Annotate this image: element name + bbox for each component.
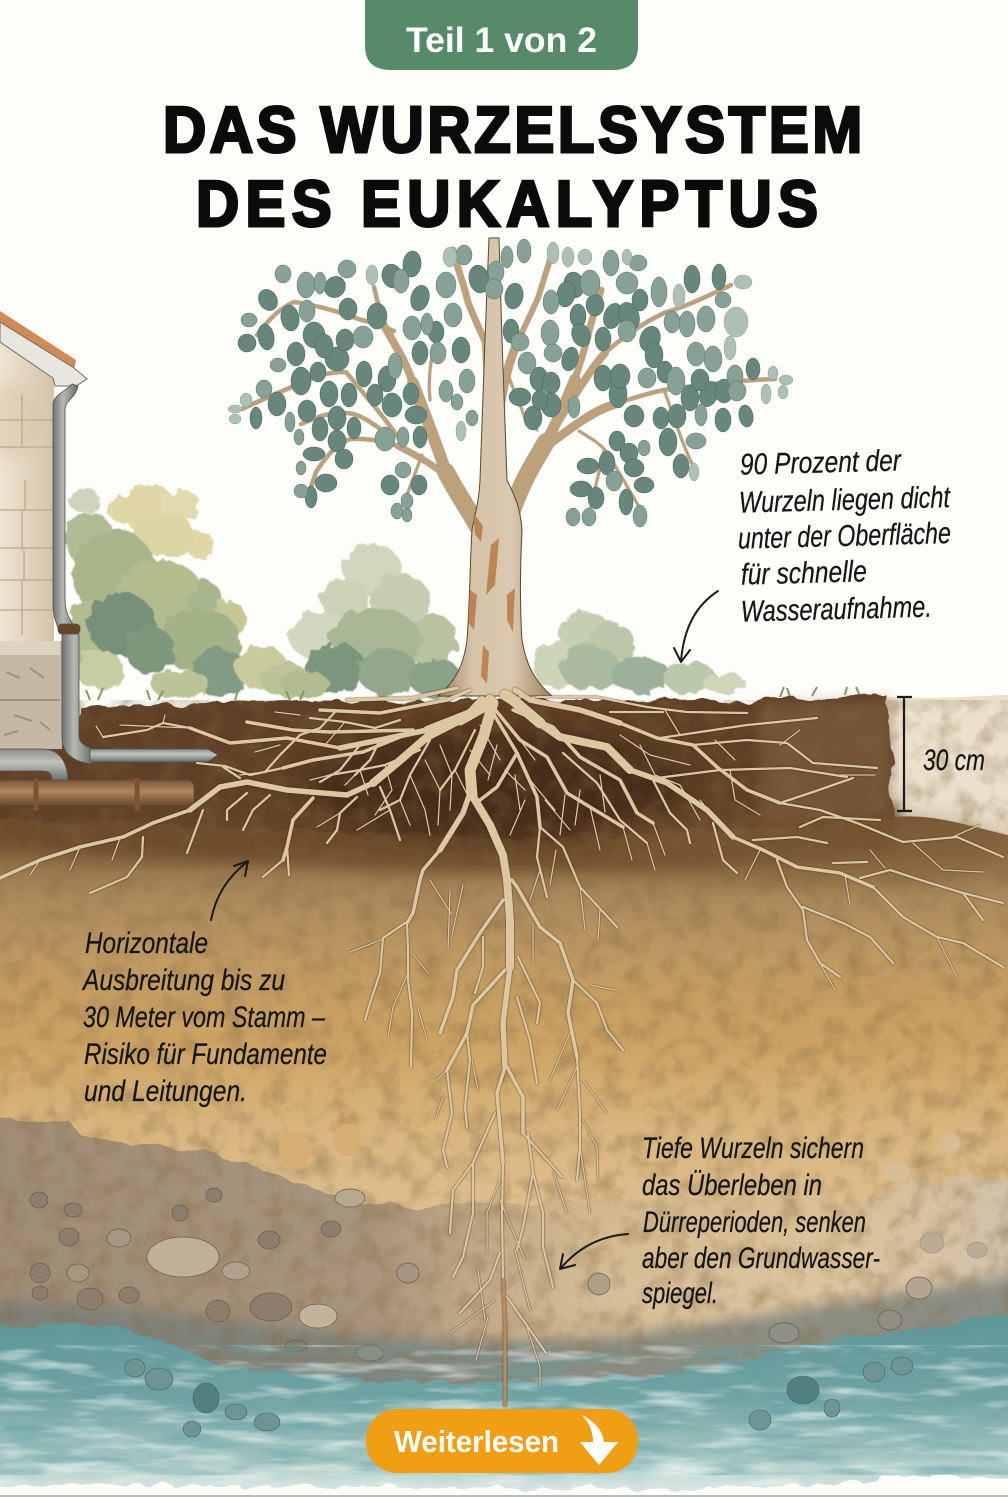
root: left spread [0, 688, 490, 893]
copper water main [0, 780, 194, 808]
soil: shaded left subsoil [10, 813, 350, 857]
branches [242, 250, 775, 535]
foliage [228, 239, 793, 527]
depth bracket: 30 cm [897, 697, 985, 811]
water dark streaks [0, 1345, 1008, 1475]
root: taproot [435, 703, 623, 1405]
leaves: mid [241, 239, 746, 527]
callout: Horizontale Ausbreitung: Horizontale [85, 927, 208, 960]
water stones [125, 1357, 913, 1437]
tree group: right [531, 612, 747, 694]
root system [0, 688, 1003, 1405]
arrow: to horizontal roots [211, 861, 248, 920]
plinth stones [0, 668, 60, 735]
masonry joints [0, 395, 54, 635]
left drain elbow [0, 749, 68, 782]
tree group: left [64, 484, 309, 698]
copper couplings [36, 778, 137, 811]
title: DAS WURZELSYSTEM [163, 94, 862, 167]
callout: Horizontale Ausbreitung: Ausbreitung bis zu [81, 964, 285, 997]
callout: Horizontale Ausbreitung [81, 927, 327, 1108]
callout: 90 Prozent: 90 Prozent der [740, 444, 902, 482]
arrow: to deep roots [560, 1234, 628, 1269]
callout: Horizontale Ausbreitung: und Leitungen. [84, 1075, 247, 1108]
soil: dark humus band [0, 697, 893, 838]
pebbles in gravel layer [30, 1124, 987, 1361]
groundwater [0, 1311, 1008, 1497]
roof tiles [0, 311, 76, 370]
paper edge below water [0, 1477, 1008, 1497]
button: Weiterlesen: Weiterlesen [394, 1424, 559, 1459]
icon: curved down arrow [580, 1415, 618, 1465]
callout: 90 Prozent: Wasseraufnahme. [740, 591, 932, 629]
depth bracket: 30 cm: 30 cm [923, 744, 985, 777]
background trees [64, 484, 747, 698]
soil: main gradient body [0, 790, 1008, 1430]
wall stain [0, 382, 40, 458]
callout: Tiefe Wurzeln [642, 1132, 880, 1310]
root: central mesh [440, 713, 617, 940]
soil: wet transition [0, 1275, 1008, 1430]
water body [0, 1311, 1008, 1497]
pipe collar [58, 624, 80, 634]
leaves: dark [235, 250, 760, 515]
callout: Tiefe Wurzeln: Tiefe Wurzeln sichern [642, 1132, 864, 1165]
bottom grey line [0, 1495, 1008, 1497]
root: right spread [493, 690, 1003, 990]
callout: 90 Prozent: für schnelle [740, 555, 867, 592]
callout: Tiefe Wurzeln: das Überleben in [642, 1169, 822, 1202]
tree group: centre [281, 544, 461, 698]
water light streaks [0, 1345, 1008, 1485]
house [0, 311, 87, 749]
soil: gravel layer [0, 1117, 1008, 1430]
downpipe lower [62, 634, 92, 764]
badge: Teil 1 von 2 [365, 0, 638, 70]
callout: Horizontale Ausbreitung: 30 Meter vom Stamm – [83, 1001, 325, 1034]
callout: Tiefe Wurzeln: Dürreperioden, senken [643, 1206, 866, 1239]
button: Weiterlesen [366, 1409, 638, 1473]
eucalyptus tree [228, 238, 793, 696]
roof fascia [0, 322, 87, 386]
callout: 90 Prozent: unter der Oberfläche [738, 517, 951, 556]
downpipe upper [53, 384, 78, 632]
title: DES EUKALYPTUS [196, 168, 818, 241]
plinth top [0, 641, 60, 655]
trunk [438, 238, 552, 696]
house wall [0, 342, 54, 642]
callout: Tiefe Wurzeln: spiegel. [642, 1277, 718, 1310]
leaves: pale [228, 242, 793, 481]
soil profile [0, 694, 1008, 1430]
drain pipes [0, 384, 218, 811]
horizontal drain pipe [90, 749, 218, 762]
callout: Tiefe Wurzeln: aber den Grundwasser- [642, 1242, 880, 1275]
bark patches [468, 512, 515, 684]
root: deep left branch [350, 793, 470, 1067]
title [163, 94, 862, 241]
soil: fade of humus to the right [760, 700, 892, 825]
soil: shaded core under the trunk [305, 730, 685, 840]
soil: shaded right subsoil [590, 818, 1008, 878]
soil: grain texture [0, 700, 1008, 1360]
soil: soft transition under humus [0, 805, 900, 873]
callout: 90 Prozent [736, 443, 955, 629]
badge: Teil 1 von 2: Teil 1 von 2 [406, 21, 597, 60]
callout: 90 Prozent: Wurzeln liegen dicht [739, 481, 952, 520]
soil: pale cut at right [885, 694, 1008, 838]
house plinth [0, 641, 62, 749]
arrow: to surface roots [674, 591, 718, 662]
grass along the ground line [86, 687, 860, 700]
callout: Horizontale Ausbreitung: Risiko für Fundamente [84, 1038, 327, 1071]
